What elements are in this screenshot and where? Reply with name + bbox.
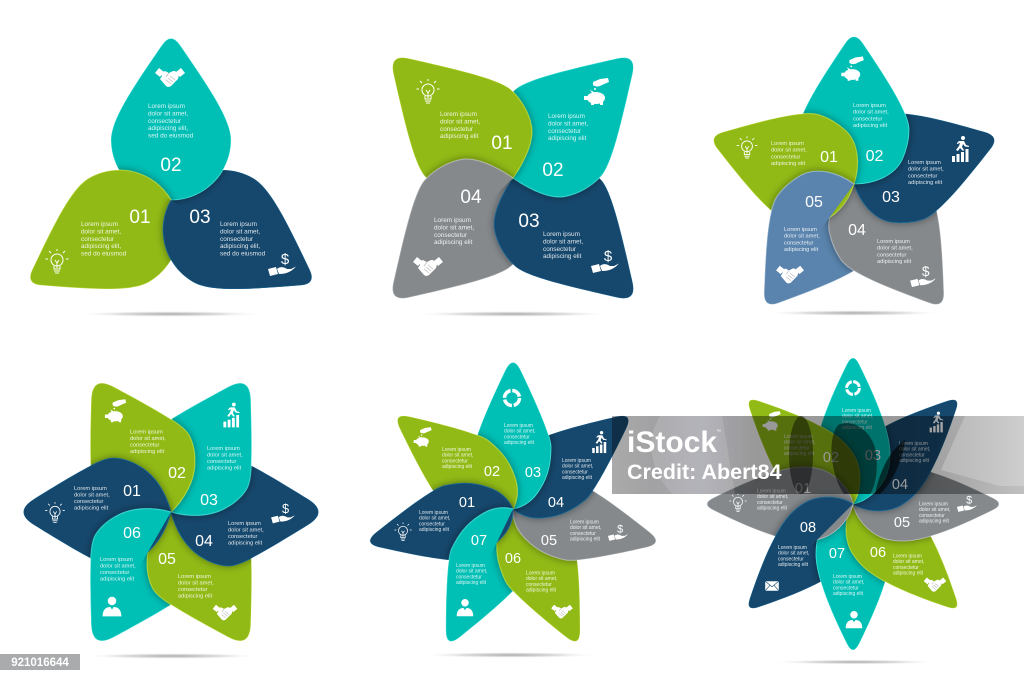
watermark: trademark: ™	[716, 429, 721, 435]
text 02: dolor sit amet,	[784, 440, 815, 446]
text 04: dolor sit amet,	[899, 447, 930, 453]
petal 02	[724, 375, 879, 530]
petal 01	[392, 58, 537, 190]
text 04: consectetur	[228, 534, 258, 540]
text 02: adipiscing elit	[442, 464, 473, 470]
text 02: consectetur	[130, 442, 160, 448]
icon: light bulb	[737, 136, 757, 158]
petals	[30, 38, 312, 289]
number 02: 02	[168, 465, 186, 482]
text 05: dolor sit amet,	[784, 234, 820, 240]
icon: light bulb	[46, 249, 68, 273]
text 01: dolor sit amet,	[74, 492, 110, 498]
text 02: Lorem ipsum	[784, 434, 813, 440]
petal 06 overlap	[86, 505, 172, 640]
text 08: Lorem ipsum	[778, 545, 807, 551]
icon: hand with dollar	[271, 501, 295, 523]
petal 03	[169, 383, 256, 519]
text 02: consectetur	[442, 458, 468, 464]
icon: handshake	[924, 578, 946, 592]
petal 08	[724, 478, 879, 633]
text 02: consectetur	[853, 116, 883, 122]
text 04: adipiscing elit	[877, 259, 912, 265]
panel: six-petal chart	[24, 383, 318, 641]
text 01: consectetur	[440, 126, 474, 133]
text 02: Lorem ipsum	[130, 430, 163, 436]
icon: hand with dollar	[591, 248, 619, 273]
text 03: consectetur	[543, 246, 577, 253]
text 02: adipiscing elit	[130, 449, 165, 455]
number 07: 07	[471, 533, 487, 549]
petal 02	[90, 383, 200, 516]
icon: person	[457, 599, 473, 616]
petal 02	[398, 416, 522, 512]
text 04: adipiscing elit	[562, 475, 593, 481]
text 04: consectetur	[899, 452, 925, 458]
text 02: sed do eiusmod	[148, 133, 194, 140]
text 02: consectetur	[148, 118, 182, 125]
text 03: dolor sit amet,	[504, 429, 535, 435]
image id tag	[0, 654, 80, 670]
icon: piggy bank	[414, 427, 432, 447]
watermark band	[612, 416, 1024, 494]
text 01: dolor sit amet,	[440, 118, 480, 125]
icon: person	[103, 597, 121, 616]
text 01: Lorem ipsum	[419, 510, 448, 516]
number 03: 03	[525, 465, 541, 481]
icon: handshake	[413, 257, 443, 276]
petal 01	[30, 165, 177, 289]
text 06: consectetur	[100, 570, 130, 576]
petal 04	[827, 375, 982, 530]
panel: five-petal chart	[714, 36, 994, 304]
text 02: Lorem ipsum	[853, 103, 886, 109]
text 02: adipiscing elit,	[148, 125, 188, 132]
petal 03	[475, 362, 551, 509]
text 03: dolor sit amet,	[543, 238, 583, 245]
text 01: Lorem ipsum	[757, 488, 786, 494]
text 02: consectetur	[548, 128, 582, 135]
text 03: adipiscing elit	[908, 180, 943, 186]
text 03: Lorem ipsum	[908, 160, 941, 166]
text 05: dolor sit amet,	[919, 507, 950, 513]
text 01: consectetur	[757, 500, 783, 506]
text 06: dolor sit amet,	[893, 559, 924, 565]
text 03: adipiscing elit	[504, 440, 535, 446]
image id tag: 921016644	[11, 657, 69, 669]
text 02: adipiscing elit	[853, 123, 888, 129]
text 06: dolor sit amet,	[100, 564, 136, 570]
petals	[392, 58, 634, 298]
text 03: dolor sit amet,	[207, 452, 243, 458]
text 03: Lorem ipsum	[207, 446, 240, 452]
petal 03	[490, 178, 634, 298]
petal 05	[142, 514, 254, 641]
petals	[24, 383, 318, 641]
text 05: consectetur	[919, 513, 945, 519]
petal 07	[446, 543, 514, 642]
petal 03 overlap	[158, 198, 311, 289]
number 06: 06	[123, 525, 141, 542]
text 01: consectetur	[74, 499, 104, 505]
text 05: consectetur	[178, 587, 208, 593]
text 05: adipiscing elit	[178, 594, 213, 600]
text 01: Lorem ipsum	[440, 111, 477, 118]
number 04: 04	[892, 477, 908, 493]
text 04: dolor sit amet,	[877, 246, 913, 252]
number 01: 01	[129, 207, 151, 228]
text 04: Lorem ipsum	[899, 441, 928, 447]
text 03: consectetur	[842, 419, 868, 425]
text 01: adipiscing elit,	[81, 243, 121, 250]
icon: hand with dollar	[957, 494, 977, 512]
petal 06	[88, 552, 173, 641]
text 02: Lorem ipsum	[548, 113, 585, 120]
number 01: 01	[123, 483, 141, 500]
text 03: dolor sit amet,	[842, 414, 873, 420]
icon: piggy bank	[841, 56, 864, 81]
text 07: adipiscing elit	[833, 591, 864, 597]
icon: ring	[504, 390, 520, 406]
icon: runner on bars	[223, 403, 240, 427]
text 01: dolor sit amet,	[81, 228, 121, 235]
text 05: adipiscing elit	[919, 519, 950, 525]
text 06: adipiscing elit	[100, 576, 135, 582]
text 03: Lorem ipsum	[543, 231, 580, 238]
petal 04	[171, 458, 318, 566]
petal 05	[853, 467, 999, 541]
text 01: dolor sit amet,	[757, 494, 788, 500]
text 02: consectetur	[784, 445, 810, 451]
petals	[707, 358, 999, 650]
text 05: adipiscing elit	[570, 537, 601, 543]
number 03: 03	[200, 492, 218, 509]
number 01: 01	[491, 133, 513, 154]
text 01: adipiscing elit	[757, 506, 788, 512]
panel: seven-petal chart	[370, 362, 656, 642]
watermark: iStock logo: iStock	[627, 426, 717, 459]
petal 05 overlap	[764, 166, 856, 303]
text 01: dolor sit amet,	[419, 516, 450, 522]
text 02: dolor sit amet,	[853, 110, 889, 116]
number 06: 06	[870, 545, 886, 561]
text 02: dolor sit amet,	[548, 120, 588, 127]
number 05: 05	[158, 551, 176, 568]
number 04: 04	[460, 187, 482, 208]
number 02: 02	[823, 450, 839, 466]
petal 03	[816, 358, 890, 504]
number 02: 02	[866, 148, 884, 165]
text 06: adipiscing elit	[526, 588, 557, 594]
text 08: consectetur	[778, 556, 804, 562]
text 07: Lorem ipsum	[833, 574, 862, 580]
watermark: credit: Credit: Abert84	[627, 460, 782, 484]
text 04: adipiscing elit	[434, 239, 473, 246]
text 03: Lorem ipsum	[220, 221, 257, 228]
text 03: Lorem ipsum	[504, 423, 533, 429]
text 03: adipiscing elit	[543, 253, 582, 260]
icon: handshake	[213, 605, 237, 620]
panel: eight-petal chart	[707, 358, 999, 650]
icon: runner on bars	[930, 412, 943, 432]
number 01: 01	[820, 149, 838, 166]
text 01: Lorem ipsum	[771, 141, 804, 147]
icon: light bulb	[394, 522, 412, 540]
petals	[714, 36, 994, 304]
icon: handshake	[155, 68, 185, 87]
number 05: 05	[805, 194, 823, 211]
text 05: Lorem ipsum	[784, 227, 817, 233]
petal 02	[511, 58, 634, 200]
text 04: Lorem ipsum	[228, 521, 261, 527]
petal 03	[852, 112, 994, 227]
petal 03	[170, 168, 312, 289]
petal 05	[764, 210, 856, 304]
petal 04	[513, 416, 628, 522]
text 03: dolor sit amet,	[220, 228, 260, 235]
text 06: Lorem ipsum	[893, 554, 922, 560]
number 06: 06	[505, 551, 521, 567]
number 03: 03	[189, 207, 211, 228]
text 03: consectetur	[504, 434, 530, 440]
text 01: consectetur	[81, 236, 115, 243]
number 03: 03	[882, 189, 900, 206]
text 02: dolor sit amet,	[442, 453, 473, 459]
text 03: Lorem ipsum	[842, 408, 871, 414]
text 05: dolor sit amet,	[178, 580, 214, 586]
icon: handshake	[551, 605, 573, 618]
petal 01	[370, 478, 518, 562]
number 03: 03	[865, 448, 881, 464]
panel: three-petal chart	[30, 38, 312, 289]
text 01: sed do eiusmod	[81, 251, 127, 258]
text 06: consectetur	[893, 565, 919, 571]
number 04: 04	[848, 222, 866, 239]
number 02: 02	[484, 464, 500, 480]
number 04: 04	[548, 495, 564, 511]
number 05: 05	[541, 533, 557, 549]
petal 08 overlap	[724, 478, 879, 633]
text 07: dolor sit amet,	[456, 569, 487, 575]
text 07: adipiscing elit	[456, 580, 487, 586]
text 07: consectetur	[833, 585, 859, 591]
petal 07 overlap	[445, 504, 514, 641]
text 04: dolor sit amet,	[562, 464, 593, 470]
text 02: Lorem ipsum	[148, 103, 185, 110]
text 05: adipiscing elit	[784, 247, 819, 253]
icon: piggy bank	[584, 78, 609, 105]
text 07: Lorem ipsum	[456, 563, 485, 569]
text 02: Lorem ipsum	[442, 447, 471, 453]
text 04: Lorem ipsum	[562, 458, 591, 464]
text 03: adipiscing elit	[207, 466, 242, 472]
petal 06	[827, 478, 982, 633]
text 06: Lorem ipsum	[100, 557, 133, 563]
petal 01	[714, 108, 862, 224]
text 01: dolor sit amet,	[771, 148, 807, 154]
text 01: adipiscing elit	[771, 161, 806, 167]
petal 04 overlap	[392, 154, 516, 296]
icon: hand with dollar	[608, 523, 628, 541]
text 05: consectetur	[784, 240, 814, 246]
number 04: 04	[195, 533, 213, 550]
text 03: sed do eiusmod	[220, 251, 266, 258]
text 03: adipiscing elit	[842, 425, 873, 431]
text 07: consectetur	[456, 574, 482, 580]
icon: ring	[847, 382, 859, 394]
text 05: Lorem ipsum	[919, 502, 948, 508]
text 06: consectetur	[526, 582, 552, 588]
text 04: consectetur	[434, 232, 468, 239]
petal 07	[816, 504, 890, 650]
icon: person	[846, 611, 862, 628]
text 03: consectetur	[908, 173, 938, 179]
petal 05	[511, 489, 656, 566]
text 06: Lorem ipsum	[526, 570, 555, 576]
number 03: 03	[518, 211, 540, 232]
icon: light bulb	[729, 494, 747, 512]
text 04: consectetur	[877, 252, 907, 258]
number 07: 07	[829, 546, 845, 562]
petal 06	[492, 516, 580, 642]
petal 04	[824, 186, 944, 304]
text 06: adipiscing elit	[893, 571, 924, 577]
text 01: consectetur	[419, 521, 445, 527]
petals	[370, 362, 656, 642]
text 04: Lorem ipsum	[434, 217, 471, 224]
text 04: Lorem ipsum	[877, 239, 910, 245]
number 02: 02	[160, 155, 182, 176]
text 05: Lorem ipsum	[178, 574, 211, 580]
text 01: consectetur	[771, 154, 801, 160]
petal 04	[392, 178, 513, 298]
icon: runner on bars	[592, 431, 607, 453]
text 05: consectetur	[570, 531, 596, 537]
icon: piggy bank	[763, 411, 781, 431]
text 04: consectetur	[562, 469, 588, 475]
text 02: adipiscing elit	[548, 135, 587, 142]
text 01: Lorem ipsum	[74, 486, 107, 492]
text 04: dolor sit amet,	[228, 528, 264, 534]
text 04: adipiscing elit	[228, 540, 263, 546]
text 06: dolor sit amet,	[526, 576, 557, 582]
number 08: 08	[800, 520, 816, 536]
text 03: consectetur	[220, 236, 254, 243]
text 04: dolor sit amet,	[434, 224, 474, 231]
number 01: 01	[795, 481, 811, 497]
text 05: Lorem ipsum	[570, 520, 599, 526]
petal 02	[111, 38, 231, 200]
floor shadows	[75, 310, 944, 664]
text 02: adipiscing elit	[784, 451, 815, 457]
icon: light bulb	[45, 502, 65, 522]
text 07: dolor sit amet,	[833, 580, 864, 586]
text 03: dolor sit amet,	[908, 167, 944, 173]
text 08: adipiscing elit	[778, 562, 809, 568]
number 02: 02	[542, 160, 564, 181]
icon: handshake	[776, 266, 804, 283]
icon: envelope	[765, 581, 779, 591]
icon: piggy bank	[105, 399, 126, 422]
petal 01	[707, 467, 853, 541]
text 02: dolor sit amet,	[130, 436, 166, 442]
text 03: consectetur	[207, 459, 237, 465]
petal 02	[799, 37, 909, 184]
text 01: adipiscing elit	[74, 506, 109, 512]
text 01: adipiscing elit	[440, 133, 479, 140]
number 01: 01	[459, 495, 475, 511]
number 05: 05	[894, 515, 910, 531]
text 01: Lorem ipsum	[81, 221, 118, 228]
text 04: adipiscing elit	[899, 458, 930, 464]
text 05: dolor sit amet,	[570, 525, 601, 531]
icon: runner on bars	[952, 136, 969, 162]
text 01: adipiscing elit	[419, 527, 450, 533]
text 08: dolor sit amet,	[778, 551, 809, 557]
text 03: adipiscing elit,	[220, 243, 260, 250]
text 02: dolor sit amet,	[148, 110, 188, 117]
petal 01	[24, 458, 171, 566]
icon: hand with dollar	[268, 251, 296, 276]
panel: four-petal chart	[392, 58, 634, 298]
icon: light bulb	[416, 79, 440, 103]
icon: hand with dollar	[910, 264, 936, 287]
